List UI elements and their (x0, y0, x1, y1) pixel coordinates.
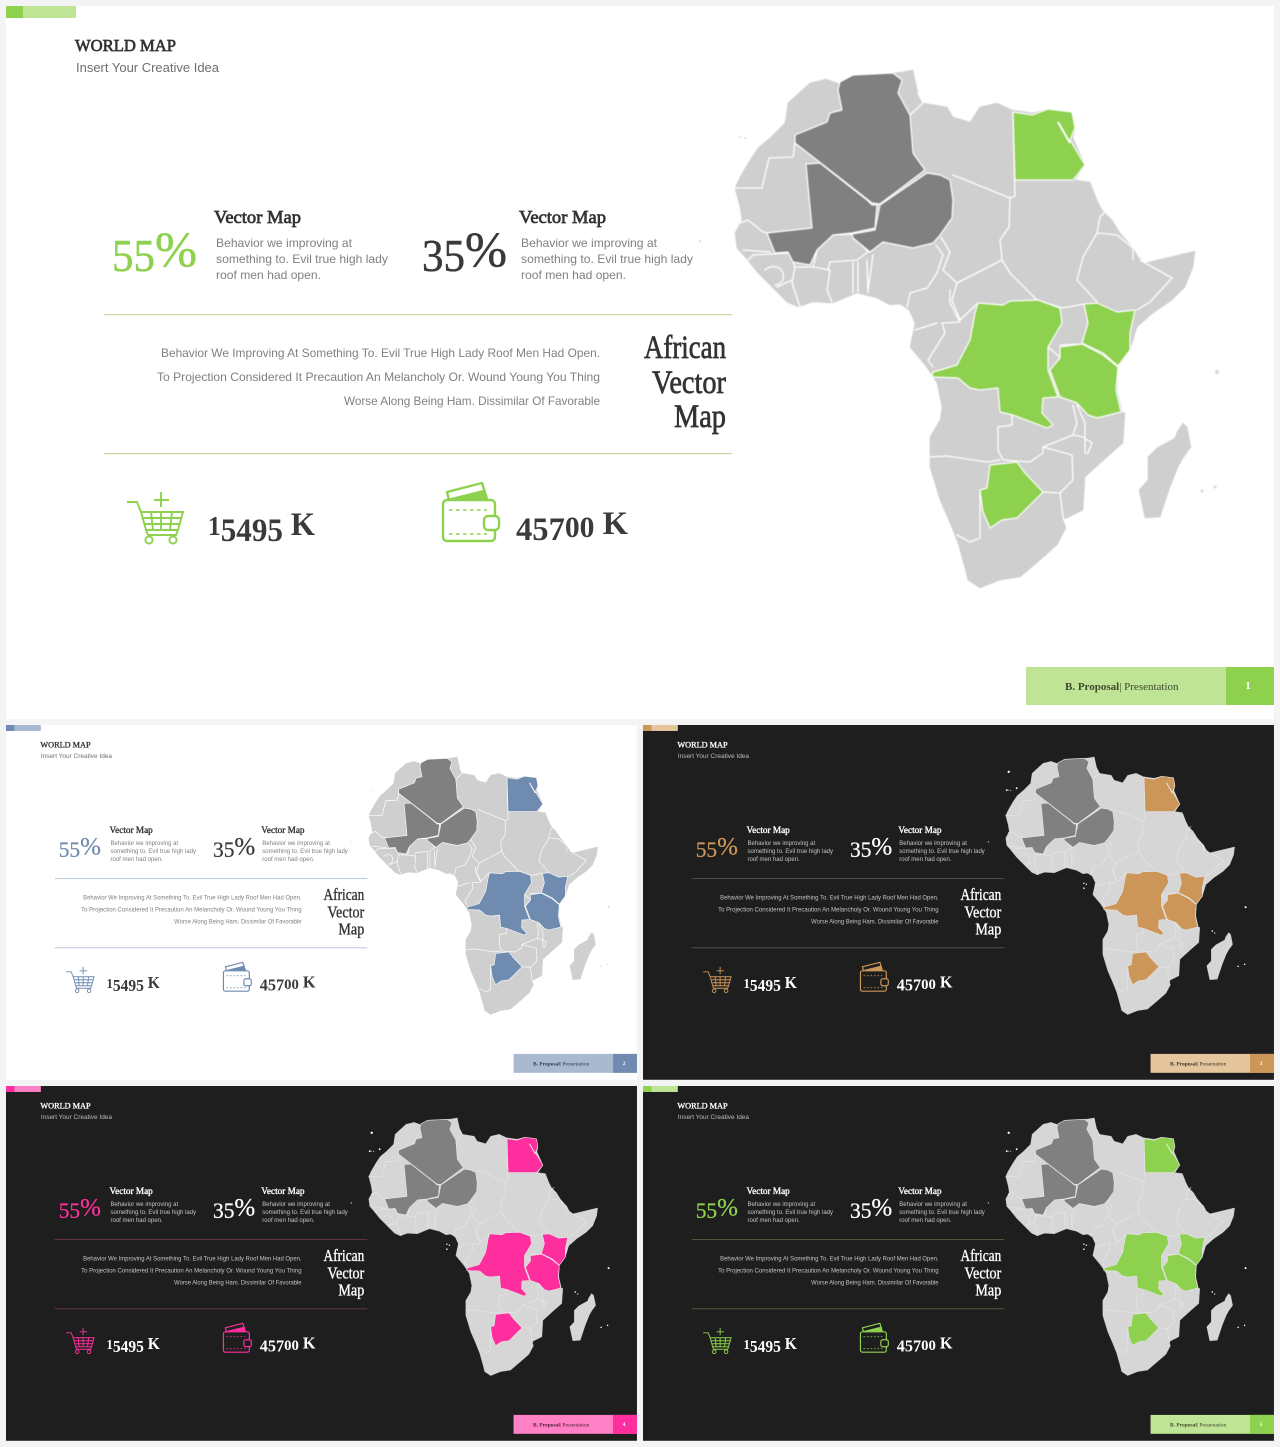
number: 15495 K: 1 (744, 1337, 750, 1352)
paragraph: Worse Along Being Ham. Dissimilar Of Favorable (811, 1281, 939, 1287)
stat: 35%: 35 (213, 1198, 234, 1223)
number: 45700 K: 457 (897, 1337, 921, 1356)
text block: vector map 2 (898, 1186, 985, 1224)
text block: vector map 1 (746, 1186, 833, 1224)
number: 45700 K: K (595, 506, 628, 542)
number: 15495 K: 5495 (750, 976, 781, 995)
footer bar: B. Proposal| Presentation (1065, 681, 1179, 693)
number: 15495 K: 5495 (113, 1337, 144, 1356)
stat: 35%: 35 (213, 837, 234, 862)
heading: African Vector Map: Vector (652, 365, 726, 401)
text block: vector map 2: something to. Evil true high lady (262, 849, 348, 855)
stat: 35%: % (871, 833, 892, 860)
footer bar (1026, 667, 1274, 705)
number: 15495 K: 1 (208, 511, 221, 541)
text block: vector map 2: Behavior we improving at (262, 841, 330, 847)
heading: African Vector Map: Map (975, 1280, 1001, 1299)
title: WORLD MAP (677, 739, 728, 749)
slide 3: tan on black (643, 725, 1274, 1080)
paragraph (81, 1257, 302, 1287)
footer bar (1151, 1415, 1274, 1434)
stat: 55% (696, 1194, 738, 1223)
text block: vector map 1: Behavior we improving at (110, 841, 179, 847)
text block: vector map 1 (109, 1186, 196, 1224)
text block: vector map 1: something to. Evil true high lady (216, 252, 388, 266)
subtitle: Insert Your Creative Idea (41, 753, 112, 760)
paragraph: To Projection Considered It Precaution An Melancholy Or. Wound Young You Thing (718, 1269, 939, 1275)
stat: 55%: 55 (112, 231, 155, 281)
stat: 55%: % (80, 833, 101, 860)
stat: 55% (59, 1194, 101, 1223)
text block: vector map 2: something to. Evil true high lady (899, 1210, 985, 1216)
footer bar: 4 (623, 1422, 626, 1428)
title: WORLD MAP (75, 36, 176, 55)
text block: vector map 1: Behavior we improving at (747, 841, 816, 847)
stat: 35%: 35 (850, 837, 871, 862)
corner tab (643, 725, 678, 731)
heading: African Vector Map: African (323, 885, 364, 904)
text block: vector map 2: roof men had open. (521, 268, 626, 282)
paragraph (81, 896, 302, 926)
stat: 55%: % (717, 1194, 738, 1221)
stat: 35%: % (234, 833, 255, 860)
paragraph (157, 346, 600, 408)
title: WORLD MAP (677, 1100, 728, 1110)
text block: vector map 1: Behavior we improving at (110, 1202, 179, 1208)
number: 15495 K: 5495 (221, 513, 283, 549)
footer bar: 2 (623, 1061, 626, 1067)
stat: 35%: % (465, 221, 507, 277)
icon: shopping cart (66, 1328, 94, 1354)
map of Africa (351, 1118, 610, 1376)
heading: African Vector Map: Map (338, 919, 364, 938)
icon: shopping cart (703, 1328, 731, 1354)
map of Africa (988, 757, 1247, 1015)
subtitle: Insert Your Creative Idea (41, 1114, 112, 1121)
number: 15495 K: K (144, 973, 160, 992)
text block: vector map 2: Behavior we improving at (899, 841, 967, 847)
stat: 55%: % (717, 833, 738, 860)
text block: vector map 2: something to. Evil true high lady (899, 849, 985, 855)
text block: vector map 1: Vector Map (214, 207, 301, 227)
stat: 55% (112, 221, 197, 281)
stat: 35%: 35 (422, 231, 465, 281)
footer bar: B. Proposal| Presentation (533, 1061, 590, 1067)
text block: vector map 1 (109, 825, 196, 863)
number: 45700 K: K (936, 973, 953, 992)
text block: vector map 2: Vector Map (898, 825, 942, 835)
text block: vector map 1: something to. Evil true high lady (747, 1210, 833, 1216)
paragraph: Worse Along Being Ham. Dissimilar Of Favorable (174, 1281, 302, 1287)
text block: vector map 2: something to. Evil true high lady (521, 252, 693, 266)
text block: vector map 2: Behavior we improving at (521, 236, 658, 250)
heading: African Vector Map: African (323, 1246, 364, 1265)
text block: vector map 2: roof men had open. (899, 857, 952, 863)
stat: 55%: 55 (696, 837, 717, 862)
footer bar: B. Proposal| Presentation (1170, 1422, 1227, 1428)
heading: African Vector Map: Vector (327, 903, 365, 922)
text block: vector map 1 (214, 207, 388, 282)
text block: vector map 2: Vector Map (261, 825, 305, 835)
text block: vector map 1: roof men had open. (110, 1218, 163, 1224)
footer bar (1151, 1054, 1274, 1073)
footer bar (514, 1054, 637, 1073)
map of Africa (699, 70, 1219, 588)
number: 45700 K: 457 (260, 1337, 284, 1356)
text block: vector map 2: Vector Map (261, 1186, 305, 1196)
number: 45700 K: 00 (284, 977, 299, 993)
paragraph: Worse Along Being Ham. Dissimilar Of Favorable (174, 920, 302, 926)
stat: 55%: 55 (59, 837, 80, 862)
stat: 55% (696, 833, 738, 862)
paragraph: Behavior We Improving At Something To. Evil True High Lady Roof Men Had Open. (83, 1257, 302, 1263)
number: 15495 K: K (144, 1334, 160, 1353)
text block: vector map 1: something to. Evil true high lady (110, 849, 196, 855)
corner tab (643, 1086, 678, 1092)
text block: vector map 1 (746, 825, 833, 863)
text block: vector map 2: Vector Map (519, 207, 606, 227)
text block: vector map 1: Behavior we improving at (216, 236, 353, 250)
icon: shopping cart (127, 492, 183, 544)
number: 45700 K: K (299, 1334, 316, 1353)
icon: wallet (223, 962, 251, 991)
stat: 35% (422, 221, 507, 281)
text block: vector map 1: something to. Evil true high lady (110, 1210, 196, 1216)
stat: 55% (59, 833, 101, 862)
heading: African Vector Map: Map (975, 919, 1001, 938)
number: 45700 K: 00 (284, 1338, 299, 1354)
footer bar (514, 1415, 637, 1434)
slide 5: green on black (643, 1086, 1274, 1441)
number: 45700 K: 00 (921, 977, 936, 993)
number: 15495 K: 5495 (750, 1337, 781, 1356)
stat: 55%: 55 (696, 1198, 717, 1223)
number: 45700 K: K (936, 1334, 953, 1353)
stat: 35% (213, 1194, 255, 1223)
text block: vector map 1: roof men had open. (747, 1218, 800, 1224)
footer bar: 3 (1260, 1061, 1263, 1067)
text block: vector map 2 (261, 1186, 348, 1224)
number: 45700 K: 457 (897, 976, 921, 995)
icon: wallet (860, 962, 888, 991)
number: 15495 K: K (283, 507, 315, 543)
heading: African Vector Map: Map (674, 399, 726, 435)
stat: 35% (850, 833, 892, 862)
map of Africa (988, 1118, 1247, 1376)
paragraph: Behavior We Improving At Something To. Evil True High Lady Roof Men Had Open. (720, 896, 939, 902)
heading: African Vector Map: Vector (964, 1264, 1002, 1283)
heading: African Vector Map: Vector (964, 903, 1002, 922)
text block: vector map 2 (261, 825, 348, 863)
paragraph: Worse Along Being Ham. Dissimilar Of Favorable (344, 394, 600, 408)
text block: vector map 1: something to. Evil true high lady (747, 849, 833, 855)
paragraph: To Projection Considered It Precaution An Melancholy Or. Wound Young You Thing (718, 908, 939, 914)
heading: African Vector Map (644, 330, 726, 435)
number: 45700 K: K (299, 973, 316, 992)
map of Africa (351, 757, 610, 1015)
icon: shopping cart (703, 967, 731, 993)
text block: vector map 2 (519, 207, 693, 282)
number: 15495 K: 1 (107, 976, 113, 991)
subtitle: Insert Your Creative Idea (76, 60, 220, 75)
number: 15495 K: K (781, 1334, 797, 1353)
footer bar: B. Proposal| Presentation (533, 1422, 590, 1428)
heading: African Vector Map: Vector (327, 1264, 365, 1283)
slide 1: green on white (6, 6, 1274, 719)
text block: vector map 1: Vector Map (109, 825, 153, 835)
text block: vector map 1: roof men had open. (747, 857, 800, 863)
icon: wallet (860, 1323, 888, 1352)
heading: African Vector Map: Map (338, 1280, 364, 1299)
text block: vector map 2: Behavior we improving at (262, 1202, 330, 1208)
corner tab (6, 6, 76, 18)
text block: vector map 1: Vector Map (109, 1186, 153, 1196)
text block: vector map 1: Vector Map (746, 1186, 790, 1196)
heading: African Vector Map: African (644, 330, 726, 366)
text block: vector map 2: roof men had open. (262, 857, 315, 863)
footer bar: B. Proposal| Presentation (1170, 1061, 1227, 1067)
number: 15495 K: 5495 (113, 976, 144, 995)
number: 45700 K: 457 (260, 976, 284, 995)
stat: 35% (213, 833, 255, 862)
heading: African Vector Map: African (960, 885, 1001, 904)
paragraph: To Projection Considered It Precaution An Melancholy Or. Wound Young You Thing (81, 1269, 302, 1275)
text block: vector map 2: something to. Evil true high lady (262, 1210, 348, 1216)
text block: vector map 1: roof men had open. (216, 268, 321, 282)
title: WORLD MAP (40, 1100, 91, 1110)
stat: 55%: % (80, 1194, 101, 1221)
number: 15495 K: 1 (744, 976, 750, 991)
footer bar: 5 (1260, 1422, 1263, 1428)
subtitle: Insert Your Creative Idea (678, 753, 749, 760)
slide 2: blue on white (6, 725, 637, 1080)
stat: 35%: % (234, 1194, 255, 1221)
icon: wallet (443, 483, 499, 541)
number: 45700 K: 00 (921, 1338, 936, 1354)
icon: wallet (223, 1323, 251, 1352)
text block: vector map 2: roof men had open. (262, 1218, 315, 1224)
text block: vector map 1: roof men had open. (110, 857, 163, 863)
paragraph: Behavior We Improving At Something To. Evil True High Lady Roof Men Had Open. (161, 346, 600, 360)
number: 15495 K: K (781, 973, 797, 992)
stat: 35%: 35 (850, 1198, 871, 1223)
heading: African Vector Map: African (960, 1246, 1001, 1265)
number: 45700 K: 457 (516, 512, 565, 548)
footer bar: 1 (1245, 680, 1251, 692)
paragraph: To Projection Considered It Precaution An Melancholy Or. Wound Young You Thing (81, 908, 302, 914)
heading: African Vector Map (960, 885, 1002, 938)
stat: 35% (850, 1194, 892, 1223)
paragraph (718, 896, 939, 926)
corner tab (6, 725, 41, 731)
number: 15495 K: 1 (107, 1337, 113, 1352)
paragraph: Behavior We Improving At Something To. Evil True High Lady Roof Men Had Open. (720, 1257, 939, 1263)
text block: vector map 2: Behavior we improving at (899, 1202, 967, 1208)
stat: 55%: % (155, 221, 197, 277)
text block: vector map 2: roof men had open. (899, 1218, 952, 1224)
slide 4: pink on black (6, 1086, 637, 1441)
paragraph (718, 1257, 939, 1287)
title: WORLD MAP (40, 739, 91, 749)
text block: vector map 2 (898, 825, 985, 863)
subtitle: Insert Your Creative Idea (678, 1114, 749, 1121)
corner tab (6, 1086, 41, 1092)
text block: vector map 2: Vector Map (898, 1186, 942, 1196)
heading: African Vector Map (323, 1246, 365, 1299)
paragraph: To Projection Considered It Precaution An Melancholy Or. Wound Young You Thing (157, 370, 600, 384)
paragraph: Worse Along Being Ham. Dissimilar Of Favorable (811, 920, 939, 926)
text block: vector map 1: Vector Map (746, 825, 790, 835)
text block: vector map 1: Behavior we improving at (747, 1202, 816, 1208)
stat: 35%: % (871, 1194, 892, 1221)
heading: African Vector Map (323, 885, 365, 938)
stat: 55%: 55 (59, 1198, 80, 1223)
heading: African Vector Map (960, 1246, 1002, 1299)
number: 45700 K: 00 (565, 511, 595, 544)
paragraph: Behavior We Improving At Something To. Evil True High Lady Roof Men Had Open. (83, 896, 302, 902)
icon: shopping cart (66, 967, 94, 993)
